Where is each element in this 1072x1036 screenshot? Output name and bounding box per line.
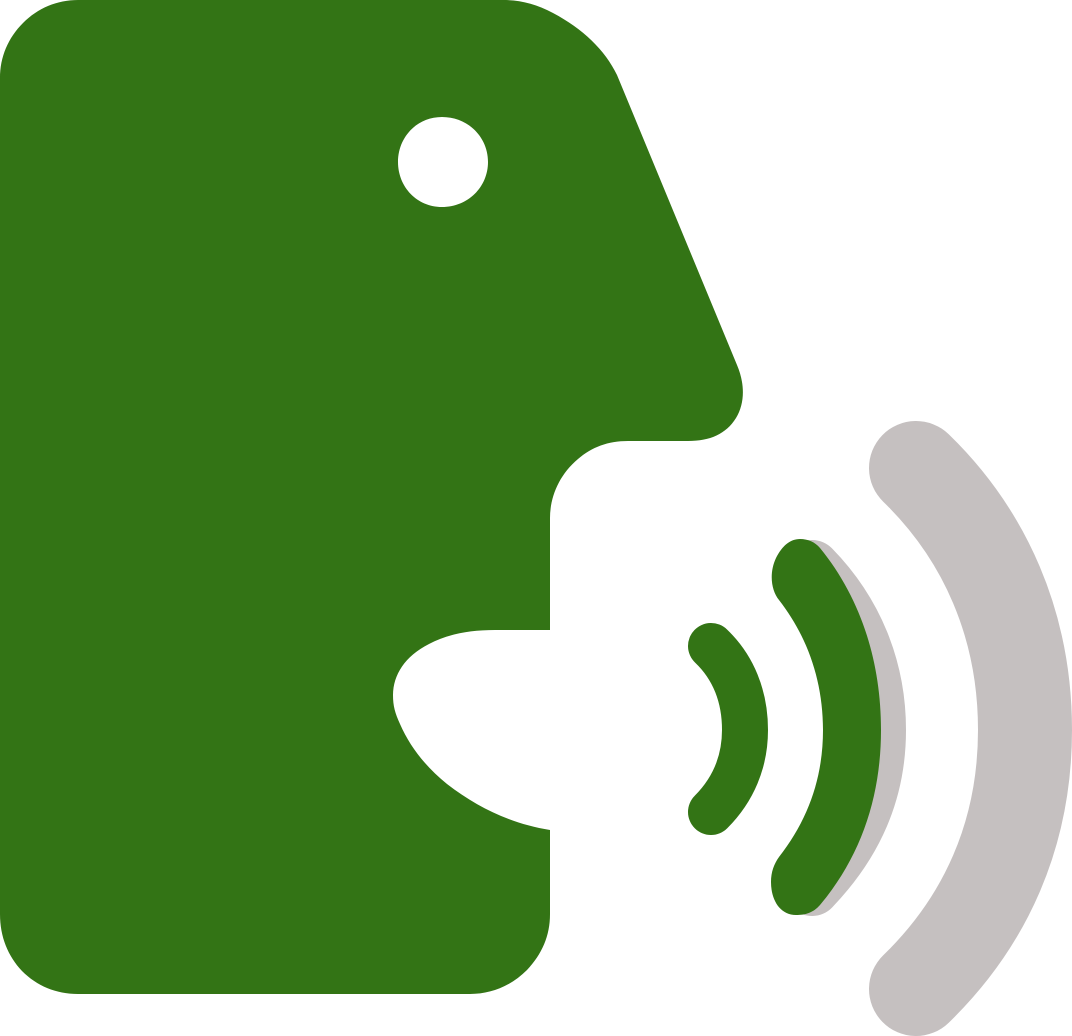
icon: inner sound wave <box>711 646 745 812</box>
icon: middle sound wave shadow <box>812 568 878 888</box>
icon: middle sound wave <box>771 539 881 915</box>
icon: outer sound wave <box>916 468 1025 989</box>
icon: head silhouette <box>0 0 743 994</box>
